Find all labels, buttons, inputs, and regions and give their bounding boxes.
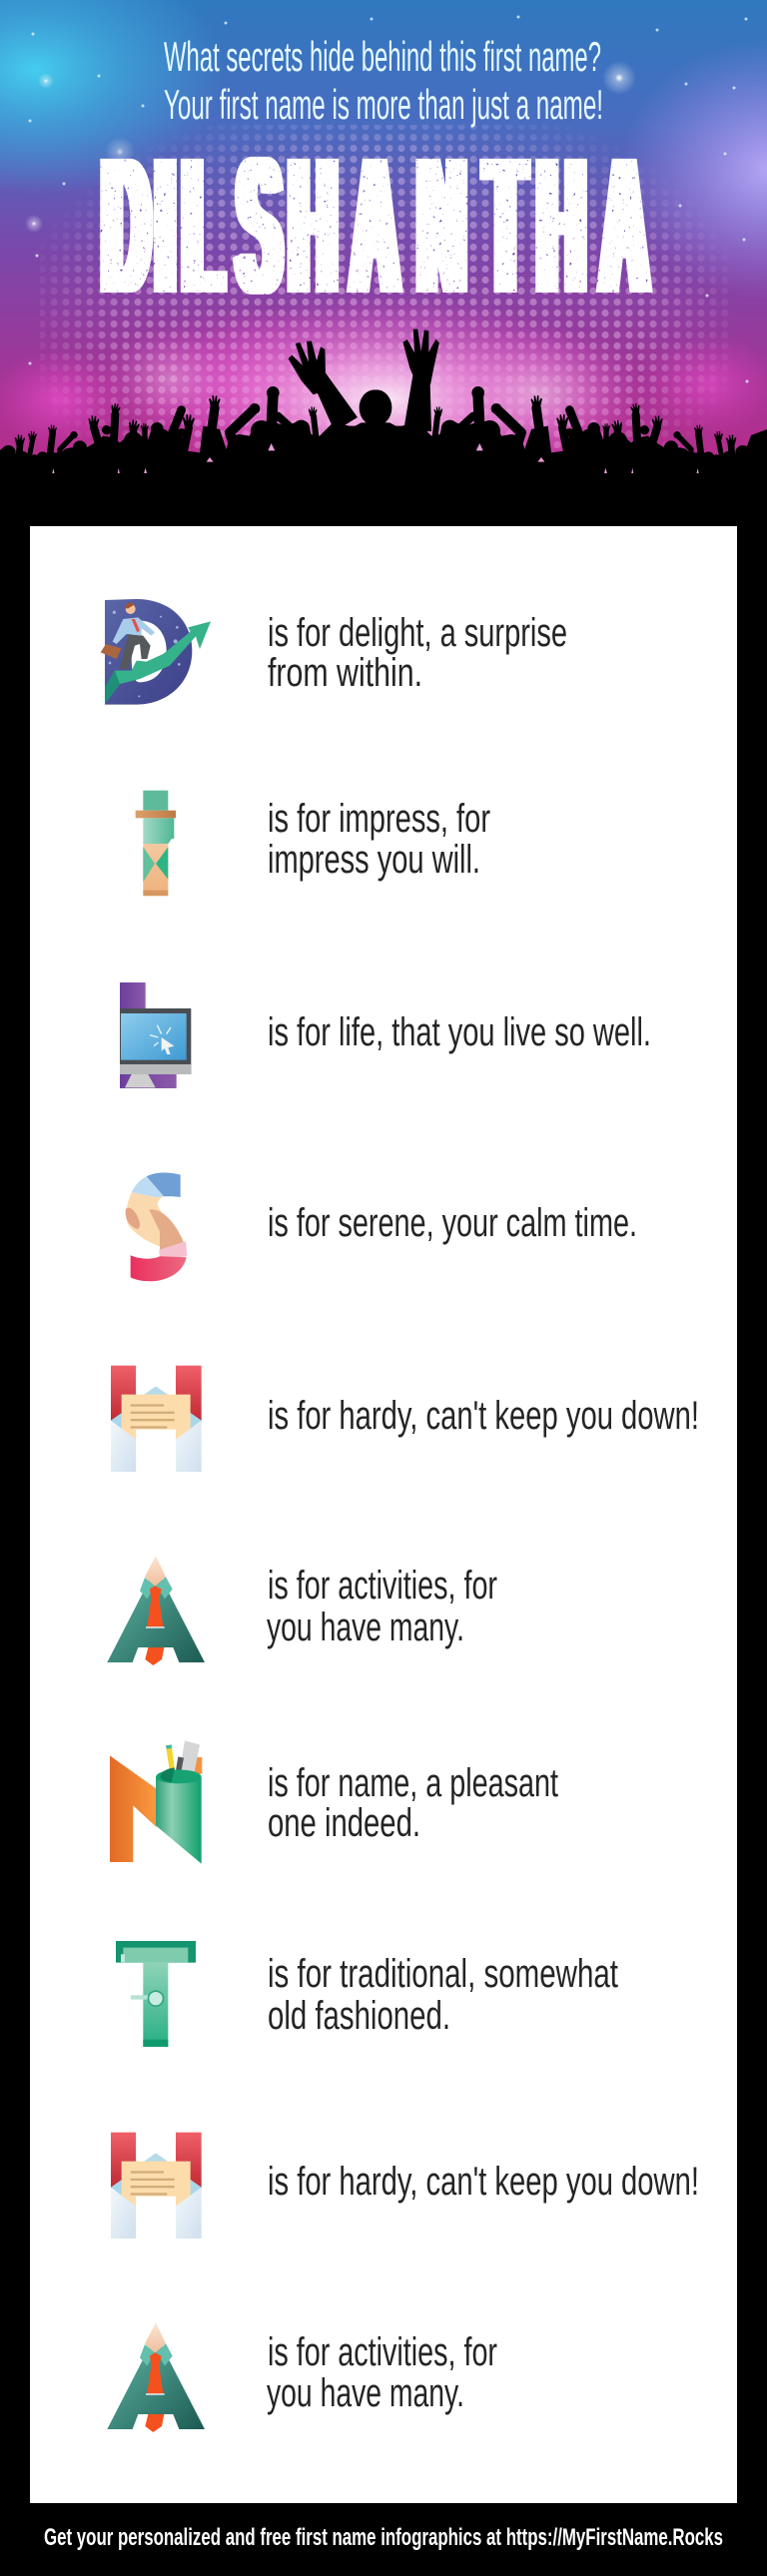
title: name: DILSHANTHA [103, 117, 647, 334]
text: D line [268, 611, 567, 695]
icon: letter I hourglass [136, 791, 176, 896]
heading: tagline [164, 33, 603, 128]
text: N line [268, 1761, 558, 1845]
text: I line: is for impress, for [268, 797, 490, 841]
text: I line: impress you will. [268, 838, 480, 882]
text: D line: is for delight, a surprise [268, 611, 567, 655]
text: T line [268, 1952, 618, 2038]
text: A line: is for activities, for [268, 1564, 497, 1608]
text: second A line: is for activities, for [268, 2330, 497, 2374]
icon: letter H with envelope [111, 1366, 202, 1472]
icon: letter S with handshake [126, 1173, 187, 1281]
icon: letter N with pencil holder [110, 1740, 202, 1864]
text: A line: you have many. [267, 1606, 464, 1649]
panel: white content area [30, 526, 737, 2503]
text: T line: is for traditional, somewhat [268, 1952, 618, 1996]
text: D line: from within. [268, 651, 422, 695]
text: S line: is for serene, your calm time. [268, 1201, 637, 1245]
text: N line: one indeed. [268, 1801, 420, 1845]
text: A line [267, 1564, 497, 1649]
icon: letter A with suit and tie [107, 1556, 205, 1665]
header: concert stage background [0, 0, 767, 504]
text: T line: old fashioned. [268, 1994, 450, 2038]
icon: second letter H with envelope [111, 2133, 202, 2239]
crowd silhouette [0, 327, 767, 529]
text: second A line: you have many. [267, 2371, 464, 2415]
icon: letter L with computer monitor [120, 982, 192, 1088]
text: second A line [267, 2330, 497, 2415]
text: I line [268, 797, 490, 882]
icon: letter T door [116, 1941, 196, 2047]
icon: second letter A with suit and tie [107, 2322, 205, 2432]
text: N line: is for name, a pleasant [268, 1761, 558, 1805]
icon: letter D with businessman on arrow [101, 599, 211, 705]
